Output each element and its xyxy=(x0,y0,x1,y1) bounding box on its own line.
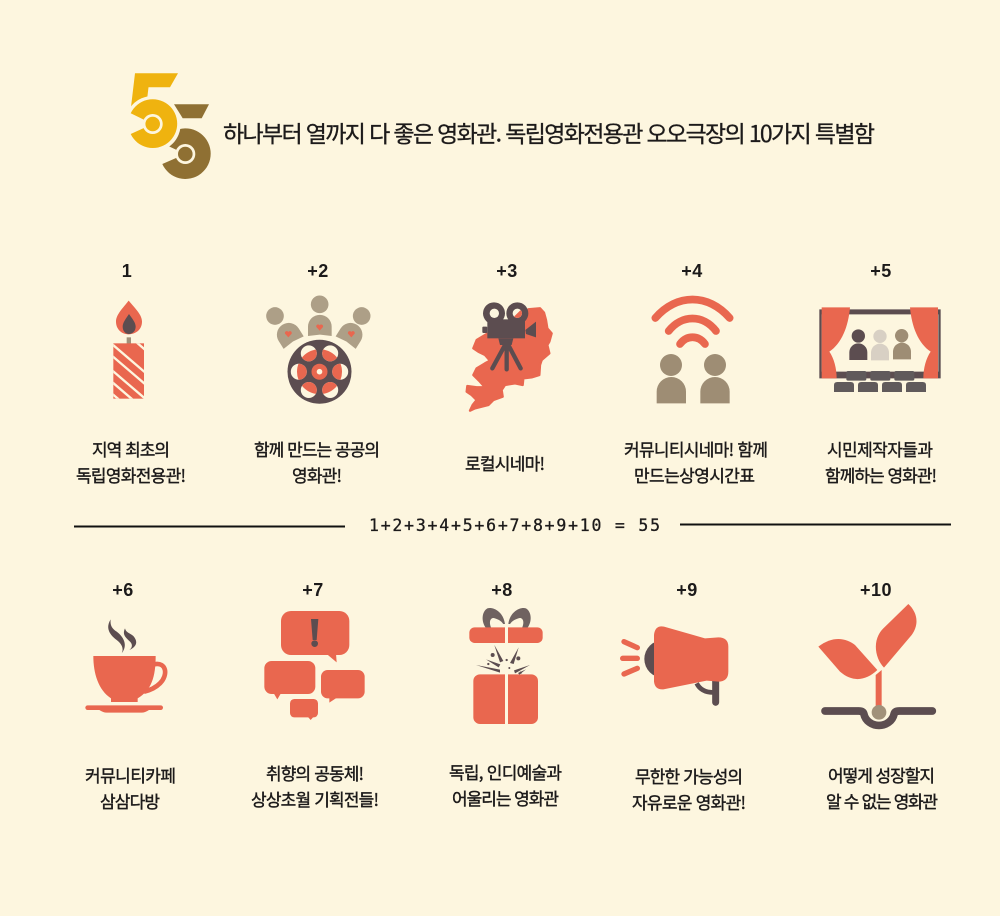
icon: map and movie camera xyxy=(467,302,552,411)
caption 8: 어울리는 영화관 xyxy=(452,785,559,810)
caption 7 xyxy=(251,760,379,811)
caption 10: 어떻게 성장할지 xyxy=(828,762,935,787)
caption 2: 영화관! xyxy=(292,462,342,487)
caption 9: 무한한 가능성의 xyxy=(635,763,743,788)
caption 4: 커뮤니티시네마! 함께 xyxy=(624,436,768,461)
icon: theatre stage and seats xyxy=(819,307,941,392)
icon: opening gift box xyxy=(469,608,543,725)
caption 2 xyxy=(254,436,380,487)
caption 10: 알 수 없는 영화관 xyxy=(826,788,938,813)
panel: item 3 local cinema xyxy=(465,261,552,475)
caption 8: 독립, 인디예술과 xyxy=(449,759,562,784)
divider line left xyxy=(74,526,345,528)
caption 8 xyxy=(449,759,562,810)
number 10: +10 xyxy=(860,580,892,600)
caption 10 xyxy=(826,762,938,813)
icon: audience and film reel xyxy=(266,295,370,407)
caption 1 xyxy=(76,436,186,487)
icon: candle xyxy=(113,300,144,399)
caption 2: 함께 만드는 공공의 xyxy=(254,436,380,461)
caption 1: 지역 최초의 xyxy=(92,436,170,461)
panel: item 10 sprout xyxy=(818,580,938,813)
caption 5: 함께하는 영화관! xyxy=(825,462,937,487)
caption 9 xyxy=(632,763,746,814)
divider line right xyxy=(680,524,951,526)
caption 7: 상상초월 기획전들! xyxy=(251,786,379,811)
number 4: +4 xyxy=(681,261,703,281)
formula: 1+2+3+4+5+6+7+8+9+10 = 55 xyxy=(369,516,660,535)
number 7: +7 xyxy=(302,580,324,600)
icon: coffee cup xyxy=(88,619,165,713)
number 6: +6 xyxy=(112,580,134,600)
panel: item 8 gift xyxy=(449,580,562,810)
panel: item 1 candle xyxy=(76,261,186,487)
number 5: +5 xyxy=(870,261,892,281)
caption 9: 자유로운 영화관! xyxy=(632,789,746,814)
caption 6 xyxy=(85,762,176,813)
panel: item 6 coffee xyxy=(85,580,176,813)
number 8: +8 xyxy=(491,580,513,600)
panel: item 2 film reel with people xyxy=(254,261,380,487)
icon: speech bubbles xyxy=(264,611,365,720)
panel: item 9 megaphone xyxy=(623,580,746,814)
caption 6: 삼삼다방 xyxy=(100,788,160,813)
icon: sprout xyxy=(818,604,932,725)
caption 4: 만드는상영시간표 xyxy=(634,462,755,487)
icon: megaphone xyxy=(623,626,728,702)
logo: double five film reels xyxy=(125,73,211,179)
title: 하나부터 열까지 다 좋은 영화관. 독립영화전용관 오오극장의 10가지 특별함 xyxy=(223,115,875,149)
panel: item 4 community cinema xyxy=(624,261,768,487)
caption 7: 취향의 공동체! xyxy=(266,760,364,785)
number 1: 1 xyxy=(122,261,132,281)
icon: wifi and two people xyxy=(655,299,730,403)
panel: item 5 citizen filmmakers xyxy=(819,261,941,487)
number 9: +9 xyxy=(676,580,698,600)
number 2: +2 xyxy=(307,261,329,281)
number 3: +3 xyxy=(496,261,518,281)
caption 5 xyxy=(825,436,937,487)
panel: item 7 speech bubbles xyxy=(251,580,379,811)
caption 5: 시민제작자들과 xyxy=(827,436,933,461)
caption 3: 로컬시네마! xyxy=(465,450,545,475)
caption 6: 커뮤니티카페 xyxy=(85,762,176,787)
caption 4 xyxy=(624,436,768,487)
caption 1: 독립영화전용관! xyxy=(76,462,186,487)
